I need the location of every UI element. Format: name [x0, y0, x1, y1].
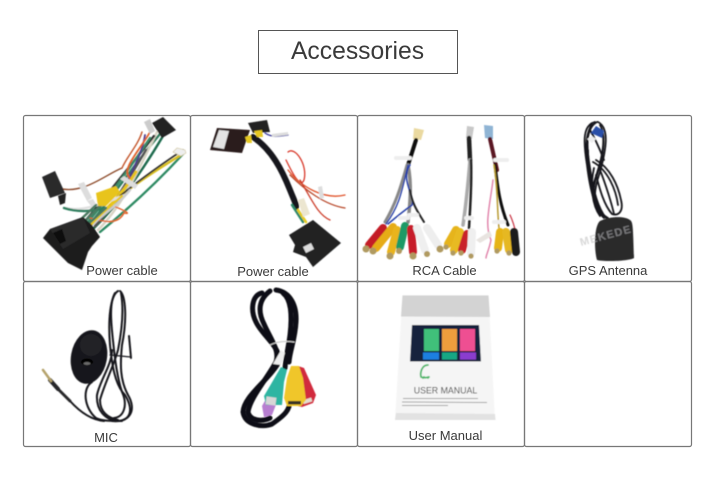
panel: user manual [395, 295, 496, 443]
label: GPS Antenna [569, 263, 648, 278]
icon: GPS antenna [579, 122, 634, 261]
panel: RCA cable [362, 125, 518, 278]
panel: power cable 1 [42, 117, 186, 278]
icon: red connector [293, 366, 316, 407]
label: Power cable [86, 263, 158, 278]
text: manual cover: USER MANUAL [414, 386, 477, 396]
label: User Manual [409, 428, 482, 443]
icon: manual booklet [395, 295, 496, 420]
icon: middle plug connector [466, 126, 474, 139]
icon: tablet screen [410, 325, 481, 362]
icon: green logo [421, 365, 429, 378]
icon: bottom connector [289, 220, 341, 267]
icon: yellow connector [284, 366, 306, 406]
icon: teal connector [264, 367, 287, 405]
icon: dark decoder box [210, 128, 250, 153]
icon: coiled cable with colored connectors [243, 290, 316, 426]
icon: top right connector [152, 117, 176, 138]
icon: top small connector [248, 120, 270, 133]
icon: audio jack [50, 380, 58, 389]
panel: power cable 2 [210, 120, 345, 279]
icon: antenna puck [595, 217, 634, 261]
icon: RCA plugs [369, 226, 516, 253]
icon: wiring harness 1 [42, 117, 186, 270]
icon: black connector block [43, 217, 100, 270]
icon: small left connector [42, 171, 65, 198]
panel: GPS antenna [569, 122, 648, 278]
icon: microphone [43, 291, 132, 421]
icon: RCA cable bundles [362, 125, 518, 260]
icon: wiring harness 2 [210, 120, 345, 267]
accessories grid frame [24, 116, 692, 446]
icon: left plug connector [413, 128, 424, 140]
label: MIC [94, 430, 118, 445]
icon: right plug connector [484, 125, 493, 139]
label: Power cable [237, 264, 309, 279]
title [258, 30, 458, 74]
panel: video cable [243, 290, 316, 426]
icon: plug tips [362, 244, 512, 260]
icon: purple connector [262, 392, 279, 417]
label: RCA Cable [412, 263, 477, 278]
title: Accessories [291, 38, 424, 65]
panel: MIC [43, 291, 132, 445]
icon: mic capsule [67, 327, 111, 387]
watermark: MEKEDE [579, 224, 633, 249]
